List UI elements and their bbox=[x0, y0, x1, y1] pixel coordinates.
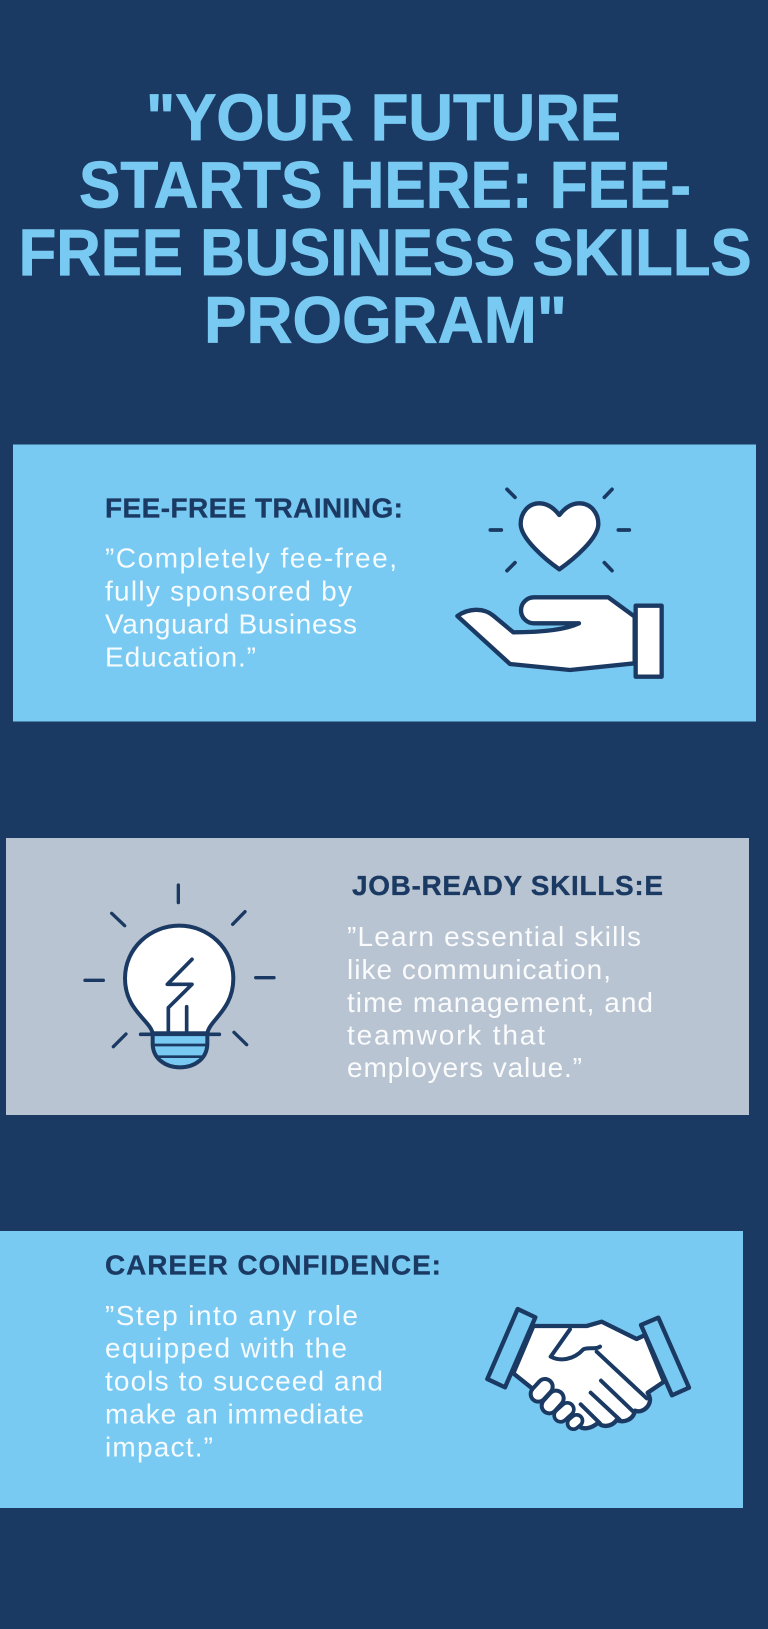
heading: career confidence: CAREER CONFIDENCE: bbox=[105, 1249, 441, 1280]
text block: job-ready skills: like communication, bbox=[347, 954, 611, 985]
icon: handshake bbox=[487, 1309, 689, 1428]
panel: job-ready skills bbox=[6, 838, 749, 1115]
title: STARTS HERE: FEE- bbox=[79, 147, 691, 221]
text block: job-ready skills: employers value.” bbox=[347, 1052, 582, 1083]
icon: heart over open hand bbox=[457, 489, 662, 677]
title bbox=[19, 80, 752, 357]
text block: fee-free training: ”Completely fee-free, bbox=[105, 542, 397, 573]
text block: fee-free training: Education.” bbox=[105, 642, 256, 672]
text block: career confidence: impact.” bbox=[105, 1432, 213, 1463]
panel: fee-free training bbox=[13, 444, 756, 722]
text block: fee-free training: fully sponsored by bbox=[105, 576, 352, 606]
text block: job-ready skills: ”Learn essential skills bbox=[347, 921, 641, 952]
text block: career confidence: tools to succeed and bbox=[105, 1366, 383, 1397]
text block: fee-free training bbox=[105, 542, 397, 672]
title: PROGRAM" bbox=[204, 283, 567, 357]
text block: job-ready skills: teamwork that bbox=[347, 1020, 545, 1051]
text block: career confidence: equipped with the bbox=[105, 1333, 347, 1364]
text block: career confidence: ”Step into any role bbox=[105, 1300, 358, 1331]
text block: job-ready skills: time management, and bbox=[347, 987, 653, 1018]
text block: fee-free training: Vanguard Business bbox=[105, 608, 357, 639]
icon: light bulb bbox=[85, 885, 274, 1067]
heading: job-ready skills: JOB-READY SKILLS:E bbox=[352, 870, 663, 901]
text block: career confidence bbox=[105, 1300, 383, 1463]
title: "YOUR FUTURE bbox=[146, 80, 621, 154]
heading: fee-free training: FEE-FREE TRAINING: bbox=[105, 492, 403, 523]
text block: career confidence: make an immediate bbox=[105, 1398, 364, 1429]
panel: career confidence bbox=[0, 1231, 743, 1508]
text block: job-ready skills bbox=[347, 921, 653, 1083]
